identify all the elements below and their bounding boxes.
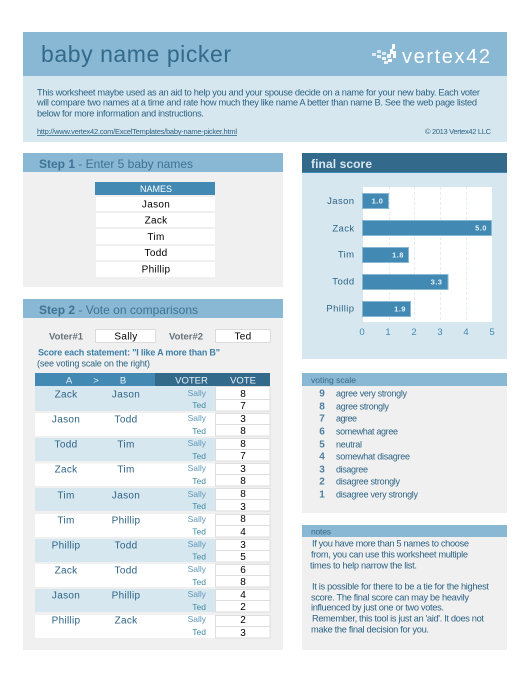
names table: Tim — [147, 232, 165, 243]
row 7: Todd — [115, 540, 137, 552]
row 7: Ted — [192, 552, 206, 562]
voters — [49, 330, 270, 342]
category labels: Todd — [332, 276, 354, 288]
scale list: agree very strongly — [336, 388, 408, 398]
row 1: Jason — [112, 390, 140, 400]
row 4: Ted — [192, 476, 206, 486]
row 4: Tim — [117, 464, 135, 476]
row 4: 8 — [240, 476, 246, 487]
row 5: Tim — [57, 490, 75, 502]
bar values: 1.8 — [392, 250, 404, 260]
bar values: 3.3 — [431, 278, 442, 286]
row 9: 2 — [240, 602, 246, 613]
names table — [95, 182, 215, 277]
row 3: Tim — [117, 440, 135, 450]
panel: step 2 — [23, 299, 283, 650]
row 5: 3 — [240, 502, 246, 513]
notes text: from, you can use this worksheet multiple — [311, 550, 468, 560]
row 2: 8 — [240, 426, 246, 437]
row 10: Phillip — [52, 616, 81, 626]
row 9: Ted — [192, 602, 206, 612]
names table: Todd — [145, 248, 167, 259]
row 10: Zack — [115, 616, 138, 626]
comparison table: B — [120, 376, 126, 386]
row 6 — [57, 514, 246, 538]
row 6: Ted — [192, 526, 206, 536]
row 10: Ted — [192, 627, 206, 637]
bar values: 5.0 — [475, 224, 487, 232]
scale list: 9 — [319, 388, 325, 400]
row 8: 6 — [240, 565, 246, 576]
row 8: Todd — [115, 566, 137, 576]
names table: Phillip — [142, 264, 171, 276]
notes text: It is possible for there to be a tie for the highest — [312, 582, 489, 592]
row 3 — [55, 438, 246, 462]
notes text — [310, 538, 489, 634]
scale list: 7 — [319, 414, 325, 424]
logo: vertex42 — [372, 44, 490, 68]
row 5: 8 — [240, 489, 246, 500]
scale list: agree — [336, 414, 357, 424]
scale list: 3 — [319, 464, 325, 476]
scale list: 5 — [319, 440, 325, 450]
row 1: 7 — [240, 401, 246, 412]
bar values: 1.9 — [394, 304, 406, 314]
row 9: 4 — [240, 590, 246, 601]
heading: step 2: Step 2 - Vote on comparisons — [39, 303, 198, 317]
row 4: Zack — [55, 464, 78, 476]
intro text: below for more information and instructions. — [37, 108, 204, 118]
row 7: Phillip — [52, 540, 81, 552]
x axis labels: 4 — [463, 327, 469, 338]
row backgrounds — [35, 386, 216, 638]
comparison table — [35, 373, 270, 639]
notes text: If you have more than 5 names to choose — [312, 538, 469, 548]
row 6: Phillip — [112, 516, 141, 526]
voters: Voter#1 — [49, 332, 84, 342]
comparison table: VOTE — [230, 376, 256, 386]
panel: voting scale — [302, 373, 507, 513]
row 6: Sally — [188, 514, 207, 524]
heading: notes: notes — [311, 526, 331, 536]
row 5 — [57, 489, 246, 513]
row 7: 3 — [240, 540, 246, 551]
category labels — [326, 196, 354, 314]
panel: notes — [302, 525, 507, 650]
row 9: Jason — [52, 590, 80, 602]
row 2: 3 — [240, 414, 246, 425]
scale list: 1 — [319, 490, 325, 500]
heading: final score: final score — [311, 157, 372, 171]
intro text — [36, 88, 480, 118]
category labels: Jason — [327, 196, 354, 207]
comparison table: > — [93, 376, 99, 386]
row 7: 5 — [240, 552, 246, 563]
row 8: Sally — [188, 564, 207, 574]
row 3: 8 — [240, 439, 246, 450]
bars — [362, 194, 492, 316]
notes text: Remember, this tool is just an 'aid'. It does not — [312, 614, 484, 624]
x axis labels — [359, 327, 495, 338]
row 1: 8 — [240, 389, 246, 400]
names table: NAMES — [140, 184, 172, 194]
row 2: Ted — [192, 426, 206, 436]
category labels: Phillip — [326, 304, 354, 314]
row 10 — [52, 614, 246, 639]
panel: final score — [302, 153, 507, 359]
x axis labels: 2 — [411, 327, 417, 338]
row 9: Phillip — [112, 590, 141, 602]
row 2: Todd — [115, 414, 137, 426]
scale list: disagree very strongly — [336, 490, 418, 500]
row 1: Sally — [188, 388, 207, 398]
intro text: This worksheet maybe used as an aid to help you and your spouse decide on a name for your new baby. Each voter — [37, 88, 480, 98]
row 10: Sally — [188, 614, 207, 624]
logo: vertex42: vertex42 — [402, 46, 490, 68]
x axis labels: 0 — [359, 327, 365, 338]
row 8: Ted — [192, 577, 206, 587]
notes text: influenced by just one or two votes. — [311, 602, 444, 612]
x axis labels: 1 — [385, 327, 391, 338]
row 3: Todd — [55, 440, 77, 450]
row 2: Jason — [52, 414, 80, 426]
title: baby name picker — [41, 41, 231, 67]
row 5: Ted — [192, 501, 206, 511]
row 1: Ted — [192, 400, 206, 410]
bar chart — [326, 187, 495, 338]
row 8: Zack — [55, 566, 78, 576]
scale list — [319, 388, 418, 500]
scale list: agree strongly — [336, 402, 390, 412]
row 10: 2 — [240, 615, 246, 626]
heading: voting scale: voting scale — [311, 375, 356, 385]
header banner — [23, 32, 507, 76]
voters: Sally — [114, 332, 138, 342]
vote cells — [216, 386, 270, 638]
intro panel — [23, 76, 507, 142]
row 9: Sally — [188, 589, 207, 599]
bar values: 1.0 — [372, 196, 383, 206]
link: http://www.vertex42.com/ExcelTemplates/baby-name-picker.html — [37, 127, 237, 136]
scale list: disagree strongly — [336, 476, 400, 486]
row 3: Ted — [192, 451, 206, 461]
x axis labels: 3 — [437, 327, 443, 338]
bar values — [372, 196, 487, 314]
scale list: somewhat agree — [336, 426, 398, 436]
notes text: score. The final score can may be heavily — [311, 592, 469, 602]
panel: step 1 — [23, 153, 283, 287]
comparison table: A — [66, 376, 73, 386]
row 5: Jason — [112, 490, 140, 502]
row 3: 7 — [240, 451, 246, 462]
row 8: 8 — [240, 577, 246, 588]
heading: step 1: Step 1 - Enter 5 baby names — [39, 157, 193, 171]
row 1 — [55, 388, 246, 412]
row 4 — [55, 463, 246, 487]
notes text: times to help narrow the list. — [310, 560, 417, 570]
scale list: somewhat disagree — [336, 452, 410, 462]
instruction: Score each statement: "I like A more than B" — [38, 348, 220, 358]
category labels: Zack — [332, 224, 354, 234]
category labels: Tim — [338, 250, 354, 260]
voters: Ted — [234, 332, 252, 342]
row 9 — [52, 589, 246, 613]
intro text: will compare two names at a time and rate how much they like name A better than name B. See the web page listed — [36, 98, 477, 108]
row 4: 3 — [240, 464, 246, 475]
scale list: neutral — [336, 440, 362, 450]
names table: Jason — [142, 200, 170, 210]
row 2 — [52, 413, 246, 437]
names table: Zack — [145, 216, 168, 226]
row 6: Tim — [57, 516, 75, 526]
scale list: 6 — [319, 426, 325, 438]
row 5: Sally — [188, 489, 207, 499]
instruction — [37, 348, 220, 368]
row 8 — [55, 564, 246, 588]
copyright: © 2013 Vertex42 LLC — [425, 127, 492, 136]
x axis labels: 5 — [489, 327, 495, 338]
scale list: 2 — [319, 476, 325, 488]
voters: Voter#2 — [169, 332, 203, 342]
row 2: Sally — [188, 413, 207, 423]
comparison table: VOTER — [175, 376, 208, 386]
notes text: make the final decision for you. — [311, 624, 429, 634]
instruction: (see voting scale on the right) — [37, 358, 150, 368]
row 7: Sally — [188, 539, 207, 549]
row 6: 4 — [240, 527, 246, 538]
row 1: Zack — [55, 390, 78, 400]
scale list: 8 — [319, 402, 325, 412]
scale list: 4 — [319, 452, 325, 462]
row 7 — [52, 539, 246, 563]
row 10: 3 — [240, 628, 246, 639]
row 6: 8 — [240, 514, 246, 525]
scale list: disagree — [336, 464, 368, 474]
row 3: Sally — [188, 438, 207, 448]
row 4: Sally — [188, 463, 207, 473]
